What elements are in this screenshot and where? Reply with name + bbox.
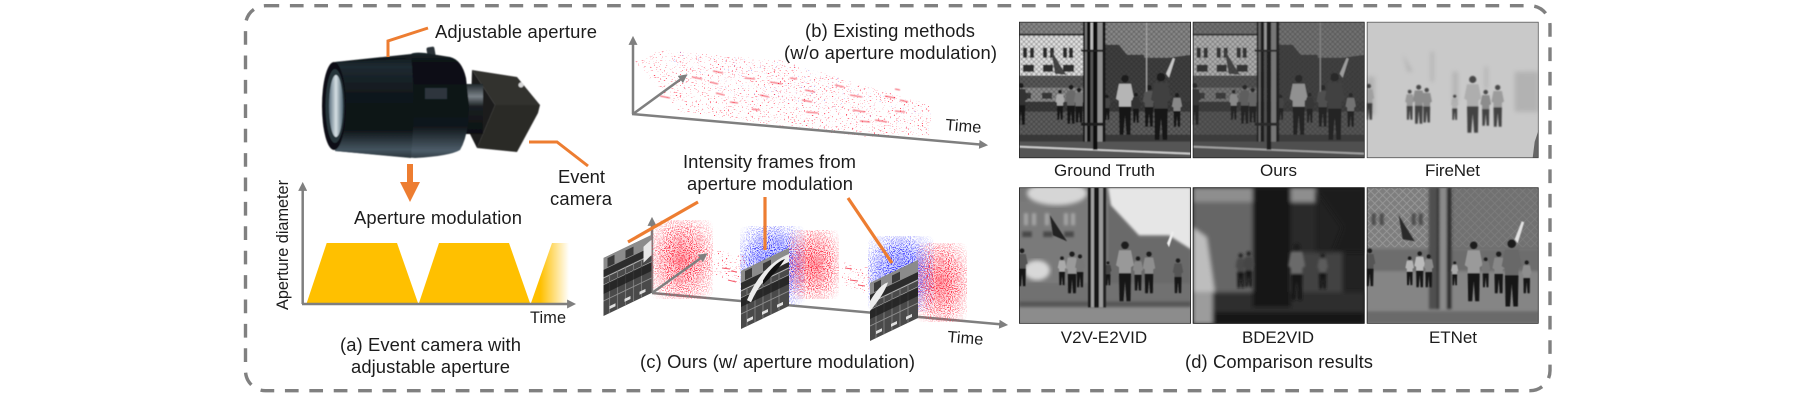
label: intensity frames: Intensity frames from [683, 151, 856, 172]
image: intensity frame 1 [604, 235, 652, 316]
caption c: (c) Ours (w/ aperture modulation) [640, 351, 915, 372]
arrow: depth axis [652, 258, 701, 293]
chart: axes [652, 225, 1000, 324]
label: BDE2VID: BDE2VID [1242, 328, 1314, 347]
arrow: event camera leader [529, 142, 588, 166]
label: x axis time: Time [530, 309, 566, 327]
arrow: leader to frame 1 [628, 202, 698, 242]
caption b: (w/o aperture modulation) [784, 42, 997, 63]
label: V2V-E2VID: V2V-E2VID [1061, 328, 1147, 347]
chart: sparse event cloud [635, 50, 932, 137]
caption a: adjustable aperture [351, 356, 510, 377]
chart: event cloud 2 [740, 226, 839, 305]
image: ETNet [1364, 187, 1539, 324]
label: y axis aperture diameter: Aperture diameter [274, 179, 292, 310]
dashed border panel [246, 6, 1550, 391]
image: ours [1188, 22, 1365, 158]
label: FireNet: FireNet [1425, 161, 1480, 180]
chart: sparse events between clouds 2 and 3 [842, 262, 872, 296]
image: BDE2VID [1193, 187, 1365, 324]
label: adjustable aperture: Adjustable aperture [435, 21, 597, 42]
chart: axes [632, 44, 980, 144]
chart: event cloud 1 [651, 220, 713, 299]
arrow: adjustable aperture leader [388, 28, 428, 57]
label: aperture modulation: Aperture modulation [354, 207, 522, 228]
label: ours: Ours [1260, 161, 1297, 180]
label: intensity frames: aperture modulation [687, 173, 853, 194]
panel: comparison results [1015, 22, 1539, 372]
chart: sparse events between clouds 1 and 2 [713, 250, 745, 285]
label: ground truth: Ground Truth [1054, 161, 1155, 180]
label: event camera [550, 166, 613, 209]
arrow: down to modulation [400, 164, 420, 202]
chart: aperture diameter over time [302, 190, 569, 304]
label: event camera: Event [558, 166, 605, 187]
caption d: (d) Comparison results [1185, 351, 1373, 372]
image: ground truth [1015, 22, 1191, 158]
arrow: leader to frame 3 [848, 198, 892, 263]
icon: event camera with lens [322, 46, 540, 158]
panel: event camera with adjustable aperture [274, 21, 613, 377]
panel: ours with aperture modulation [604, 151, 1000, 372]
arrow: leader to frame 2 [763, 197, 767, 250]
label: intensity frames [683, 151, 856, 194]
caption b [784, 20, 997, 63]
chart: event cloud 3 [868, 236, 967, 322]
label: time axis: Time [947, 328, 984, 349]
label: event camera: camera [550, 188, 613, 209]
image: intensity frame 2 [741, 248, 789, 329]
label: ETNet: ETNet [1429, 328, 1477, 347]
image: intensity frame 3 [870, 260, 918, 341]
image: FireNet [1363, 22, 1539, 158]
caption b: (b) Existing methods [805, 20, 975, 41]
panel: existing methods [632, 20, 997, 144]
caption a: (a) Event camera with [340, 334, 521, 355]
caption a [340, 334, 521, 377]
image: V2V-E2VID [1016, 181, 1191, 324]
label: time axis: Time [945, 116, 982, 137]
